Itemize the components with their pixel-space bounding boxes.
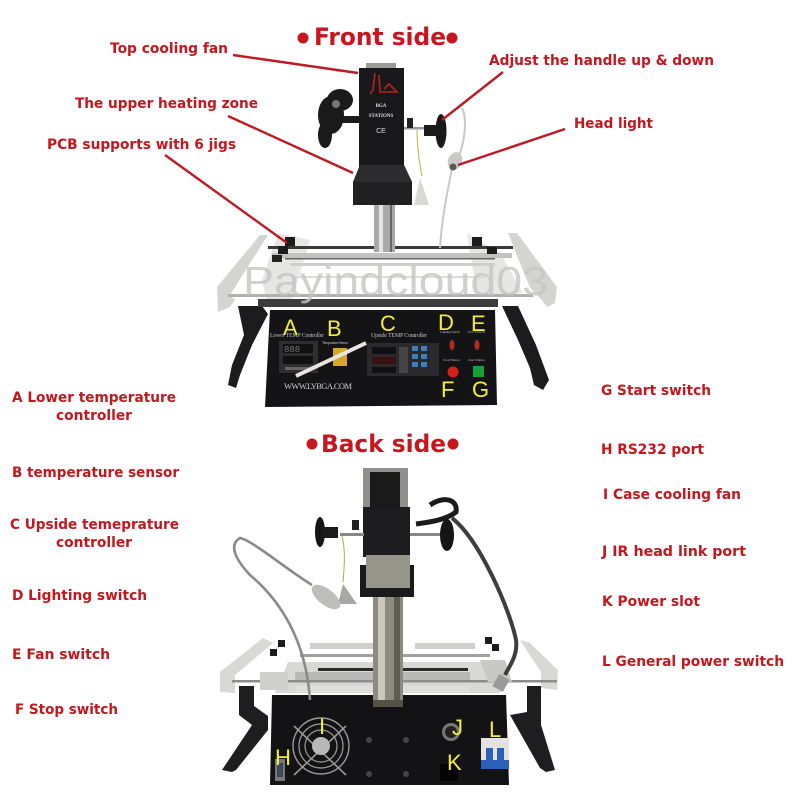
- front control box: Upside TEMP Controller: [371, 333, 427, 339]
- back head: [360, 468, 414, 597]
- yellow letters front: E: [471, 311, 486, 336]
- back legs: [222, 686, 555, 772]
- yellow letters back: I: [319, 714, 325, 739]
- J: J IR head link port: [601, 544, 746, 560]
- IR head link port: [442, 723, 460, 741]
- label: head light: Head light: [574, 116, 653, 132]
- website text: WWW.LYBGA.COM: [284, 381, 352, 391]
- L: L General power switch: [602, 654, 784, 670]
- heading: back side: Back side: [321, 430, 446, 458]
- watermark: Payindcloud03: [243, 258, 548, 304]
- switches: [440, 330, 485, 378]
- back knobs: [315, 517, 454, 604]
- front control box: Lower TEMP Controller: [270, 333, 324, 339]
- heating head: CE: [376, 128, 386, 135]
- front control box: [265, 310, 497, 407]
- yellow letters back: H: [275, 745, 291, 770]
- H: H RS232 port: [601, 442, 704, 458]
- photo: back side machine: [220, 468, 558, 785]
- G: G Start switch: [601, 383, 711, 399]
- label: PCB supports: PCB supports with 6 jigs: [47, 137, 236, 153]
- K: K Power slot: [602, 594, 700, 610]
- back base box: [270, 695, 509, 785]
- label: top cooling fan: Top cooling fan: [110, 41, 228, 57]
- A second line: controller: [56, 408, 132, 424]
- power slot: [440, 764, 458, 781]
- yellow letters front: D: [438, 310, 454, 335]
- cable connector: [416, 500, 510, 692]
- I: I Case cooling fan: [603, 487, 741, 503]
- heading: front side: Front side: [314, 23, 446, 51]
- head logo: [370, 73, 397, 94]
- back silver frame: [220, 637, 558, 693]
- E: E Fan switch: [12, 647, 110, 663]
- label: adjust handle: Adjust the handle up & down: [489, 53, 714, 69]
- yellow letters back: L: [489, 717, 501, 742]
- yellow letters front: B: [327, 316, 342, 341]
- back column: [373, 585, 403, 707]
- lower temp controller: [279, 341, 318, 373]
- F: F Stop switch: [15, 702, 118, 718]
- switches: Stop Button: [443, 358, 460, 362]
- switches: Start Button: [468, 358, 485, 362]
- front control box: Temperature Sensor: [322, 340, 349, 345]
- lower temp controller: 888: [284, 345, 300, 355]
- yellow letters front: A: [283, 315, 298, 340]
- B: B temperature sensor: [12, 465, 179, 481]
- photo: front side machine: [217, 63, 557, 407]
- yellow letters front: F: [441, 377, 454, 402]
- right knob: [404, 114, 446, 205]
- general power switch: [481, 738, 509, 769]
- back gooseneck lamp: [234, 538, 344, 700]
- D: D Lighting switch: [12, 588, 147, 604]
- switches: Lighting Switch: [440, 330, 460, 334]
- IR cable: [452, 518, 516, 675]
- left knob cluster: [318, 89, 360, 148]
- yellow letters back: K: [447, 750, 462, 775]
- screws: [366, 737, 409, 777]
- C second line: controller: [56, 535, 132, 551]
- C: C Upside temeprature: [10, 517, 179, 533]
- head light: [445, 150, 465, 172]
- yellow letters back: J: [452, 715, 463, 740]
- right legend: [601, 383, 784, 670]
- front silver frame: [217, 233, 557, 312]
- front column: [374, 205, 395, 252]
- yellow letters back: [275, 714, 501, 775]
- leader lines front: [165, 55, 565, 243]
- switches: Fan Switch: [468, 330, 485, 334]
- heating head: BGA: [376, 104, 387, 109]
- case cooling fan: [293, 718, 349, 775]
- RS232 port: [275, 759, 285, 781]
- light gooseneck: [440, 108, 465, 248]
- yellow letters front: G: [472, 377, 489, 402]
- A: A Lower temperature: [12, 390, 176, 406]
- label: upper heating zone: The upper heating zone: [75, 96, 258, 112]
- heating head: STATIONS: [369, 114, 393, 119]
- temperature sensor probe: [296, 343, 366, 376]
- upside temp controller: [367, 343, 439, 376]
- left legend: [10, 390, 179, 718]
- yellow letters front: [283, 310, 489, 402]
- yellow letters front: C: [380, 311, 396, 336]
- front legs: [228, 306, 549, 390]
- heating head: [353, 63, 412, 205]
